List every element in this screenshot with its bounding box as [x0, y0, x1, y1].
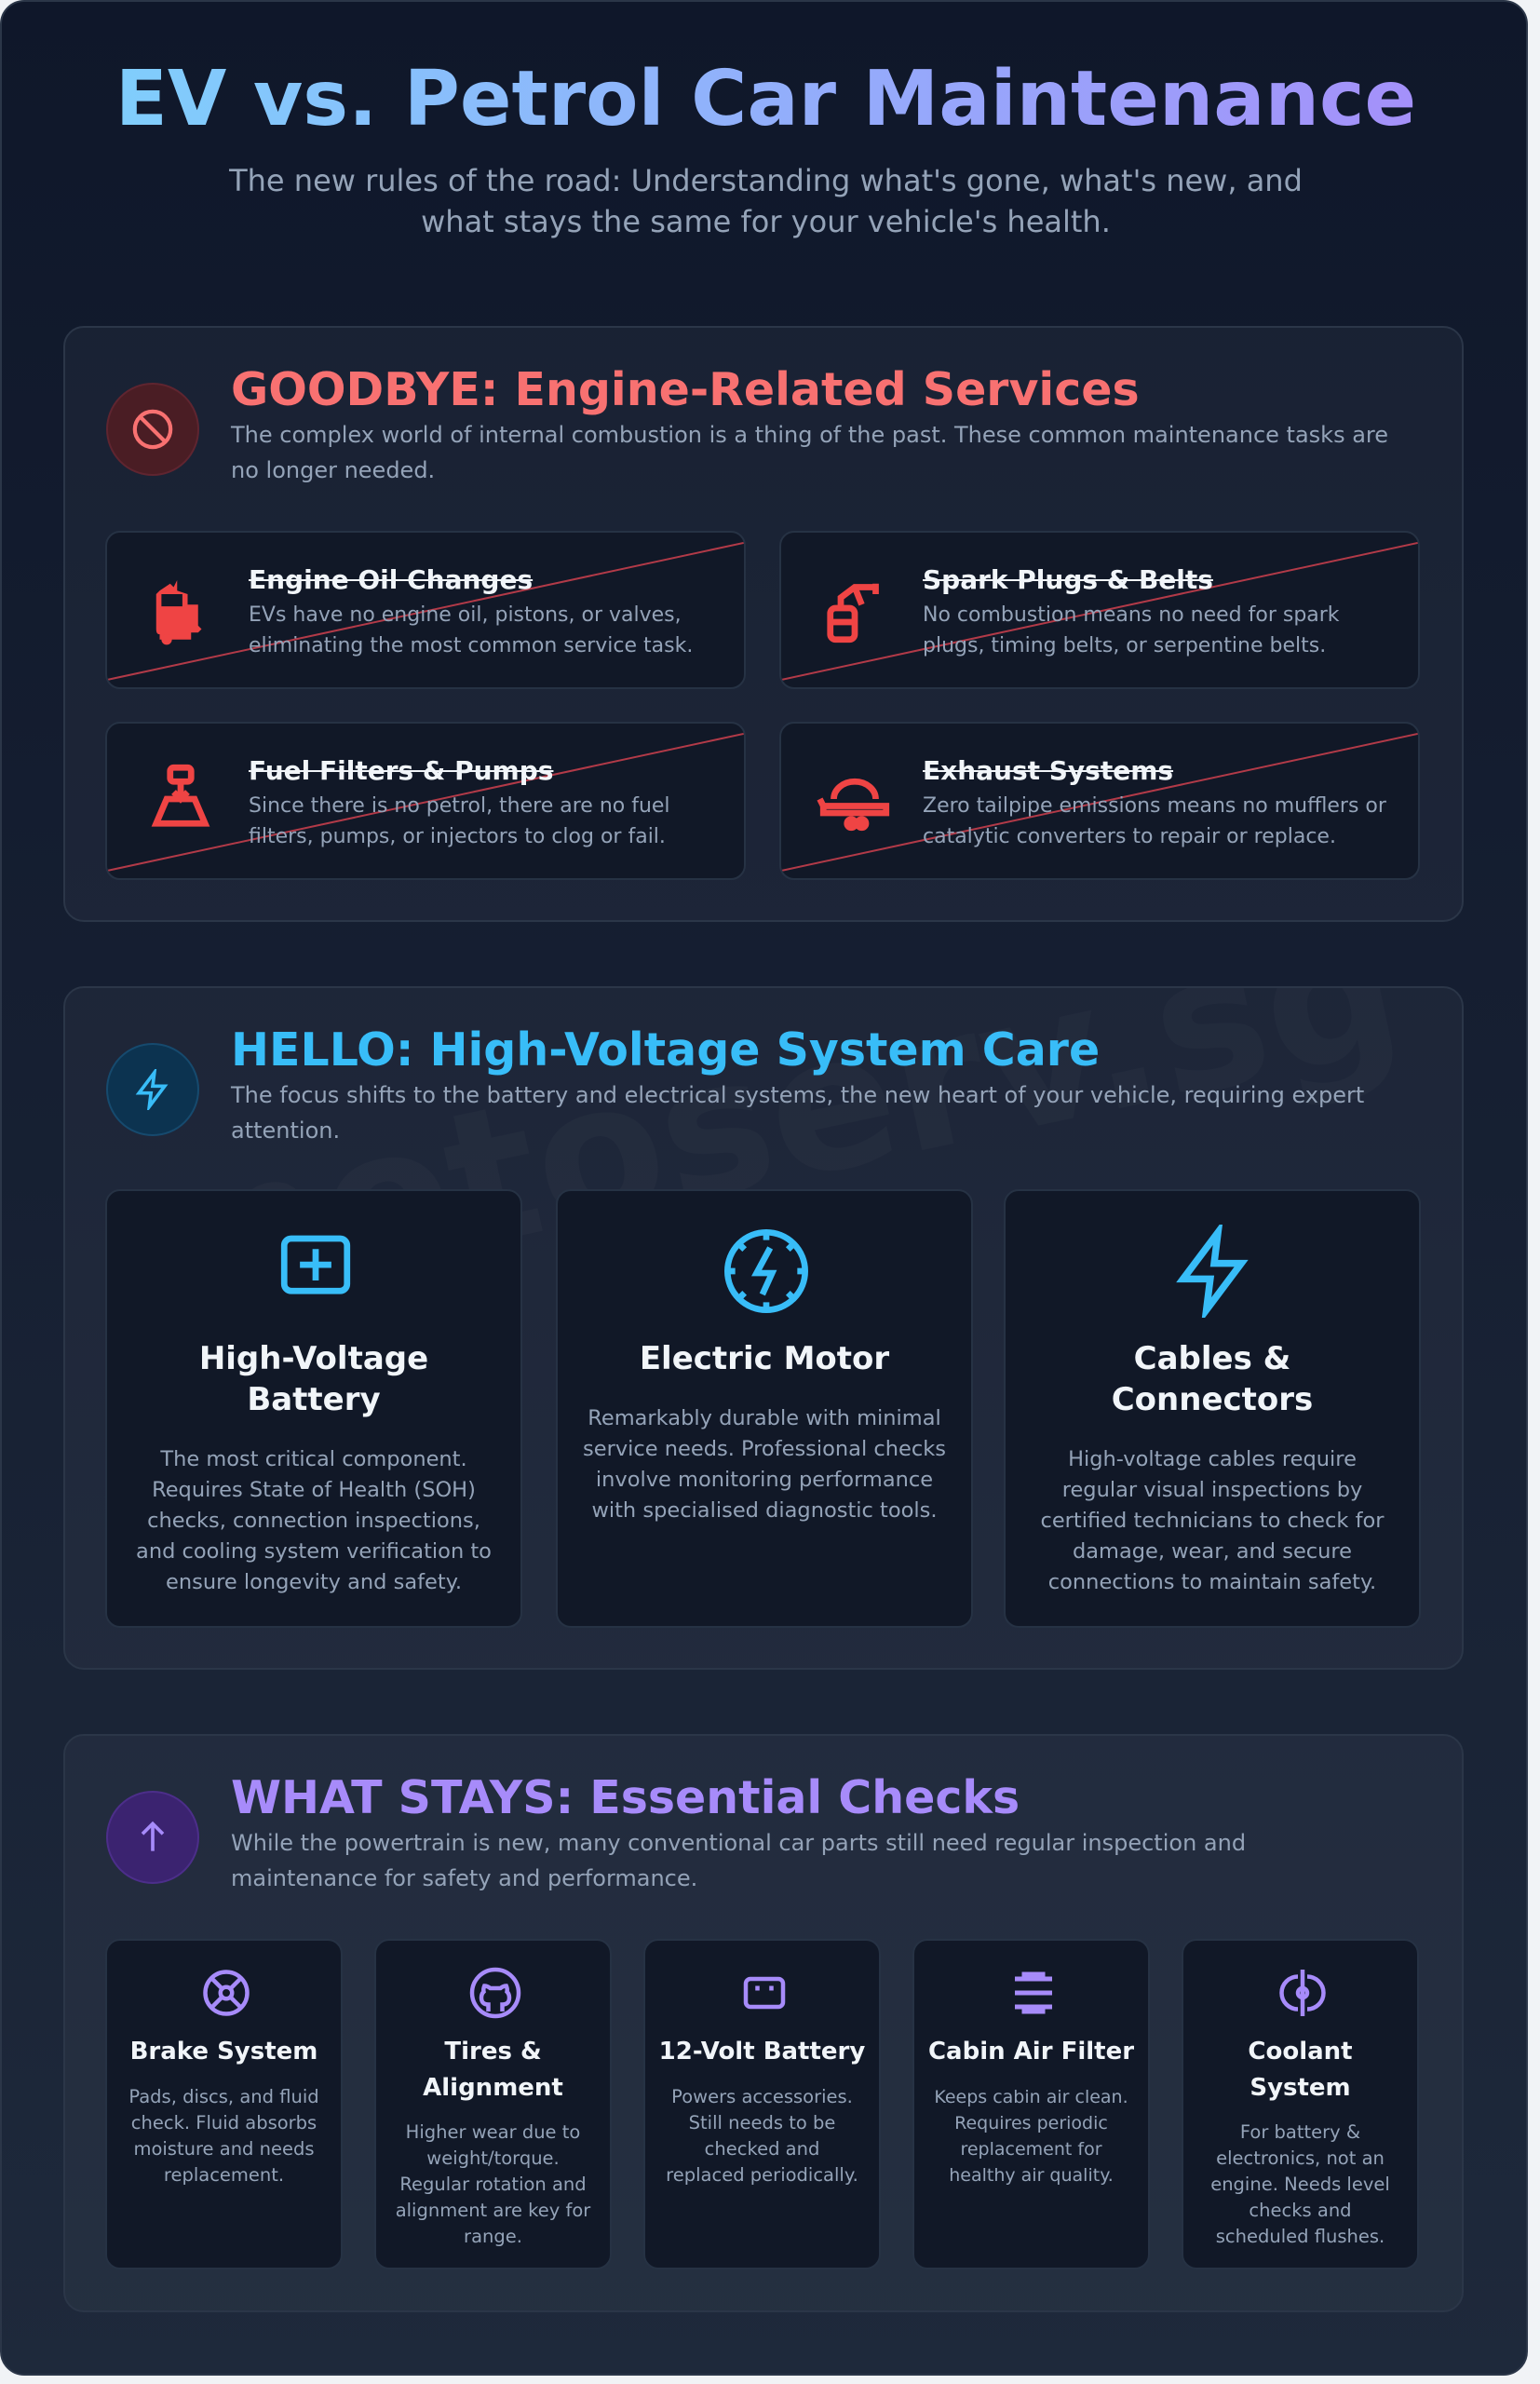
icon: tire — [469, 1967, 521, 2019]
card: tires: Higher wear due to weight/torque. Regular rotation and alignment are key for range. — [396, 2121, 590, 2247]
icon: fuel pump — [151, 764, 210, 827]
card: 12V battery — [643, 1939, 881, 2269]
heading: hello: HELLO: High-Voltage System Care — [231, 1023, 1100, 1077]
icon: motor — [724, 1229, 808, 1313]
card: tires — [374, 1939, 612, 2269]
card: spark plugs: No combustion means no need for spark plugs, timing belts, or serpentine belts. — [923, 603, 1340, 657]
card: battery: The most critical component. Requires State of Health (SOH) checks, connection inspections, and cooling system verification to ensure longevity and safety. — [136, 1447, 492, 1594]
icon: oil — [156, 580, 201, 644]
icon: battery — [281, 1235, 350, 1294]
card: cabin filter: Keeps cabin air clean. Requires periodic replacement for — [934, 2087, 1128, 2160]
card: engine oil: Engine Oil Changes — [249, 564, 533, 595]
title: EV vs. Petrol Car Maintenance — [115, 55, 1416, 143]
card: motor: Electric Motor — [640, 1340, 889, 1377]
panel: goodbye — [63, 326, 1464, 922]
card: cables: High-voltage cables require regular visual inspections by certified technicians to check for damage, wear, and secure connections to maintain safety. — [1040, 1447, 1385, 1594]
icon: arrow up — [106, 1791, 199, 1884]
card: tires: Tires & — [444, 2038, 542, 2066]
card: battery: Battery — [247, 1381, 381, 1418]
icon: lightning circle — [106, 1043, 199, 1136]
card: cabin filter: Cabin Air Filter — [928, 2038, 1134, 2066]
icon: filter — [1015, 1972, 1052, 2013]
icon: 12V battery — [743, 1976, 786, 2010]
card: motor: Remarkably durable with minimal service needs. Professional checks involve monitoring performance with specialised diagnostic tools. — [583, 1406, 946, 1523]
card: brakes: Pads, discs, and fluid check. Fluid absorbs moisture and needs replacement. — [128, 2086, 319, 2186]
heading: what stays: WHAT STAYS: Essential Checks — [231, 1771, 1020, 1824]
icon: exhaust — [817, 779, 890, 831]
icon: coolant — [1279, 1970, 1326, 2016]
card: battery: High-Voltage — [199, 1340, 428, 1377]
heading: goodbye: GOODBYE: Engine-Related Services — [231, 363, 1140, 416]
card: tires: Alignment — [423, 2074, 563, 2102]
icon: prohibited — [106, 383, 199, 476]
description: what stays: While the powertrain is new, many conventional car parts still need regular inspection and maintenance for safety and performance. — [231, 1830, 1246, 1891]
subtitle: The new rules of the road: Understanding what's gone, what's new, and what stays the same for your vehicle's health. — [229, 163, 1303, 239]
card: fuel filters: Fuel Filters & Pumps — [249, 755, 553, 786]
icon: spark plug — [827, 583, 879, 643]
card: spark plugs: Spark Plugs & Belts — [923, 564, 1213, 595]
card: exhaust — [779, 722, 1420, 880]
card: brakes — [105, 1939, 343, 2269]
card: coolant — [1182, 1939, 1419, 2269]
icon: lightning — [1176, 1225, 1249, 1318]
card: coolant: For battery & electronics, not an engine. Needs level checks and scheduled flushes. — [1210, 2121, 1390, 2247]
card: motor — [556, 1189, 973, 1628]
card: coolant: Coolant — [1248, 2038, 1353, 2066]
icon: brake — [203, 1970, 250, 2016]
card: 12V battery: Powers accessories. Still needs to be checked and replaced periodically. — [666, 2086, 858, 2186]
card: cables: Cables & — [1134, 1340, 1290, 1377]
card: fuel filters — [105, 722, 746, 880]
card: exhaust: Zero tailpipe emissions means no mufflers or catalytic converters to repair or replace. — [923, 794, 1386, 848]
panel: what stays — [63, 1734, 1464, 2312]
card: exhaust: Exhaust Systems — [923, 755, 1173, 786]
card: brakes: Brake System — [130, 2038, 317, 2066]
card: engine oil — [105, 531, 746, 689]
card: spark plugs — [779, 531, 1420, 689]
card: cables — [1004, 1189, 1421, 1628]
card: cables: Connectors — [1112, 1381, 1313, 1418]
card: cabin filter — [912, 1939, 1150, 2269]
card: 12V battery: 12-Volt Battery — [659, 2038, 865, 2066]
card: cabin filter: healthy air quality. — [949, 2165, 1114, 2186]
description: goodbye: The complex world of internal combustion is a thing of the past. These common maintenance tasks are no longer needed. — [231, 422, 1388, 483]
description: hello: The focus shifts to the battery and electrical systems, the new heart of your vehicle, requiring expert attention. — [231, 1082, 1364, 1144]
card: battery — [105, 1189, 522, 1628]
panel: hello — [63, 986, 1464, 1670]
card: fuel filters: Since there is no petrol, there are no fuel filters, pumps, or injectors to clog or fail. — [249, 794, 670, 848]
card: coolant: System — [1250, 2074, 1351, 2102]
card: engine oil: EVs have no engine oil, pistons, or valves, eliminating the most common service task. — [249, 603, 693, 657]
